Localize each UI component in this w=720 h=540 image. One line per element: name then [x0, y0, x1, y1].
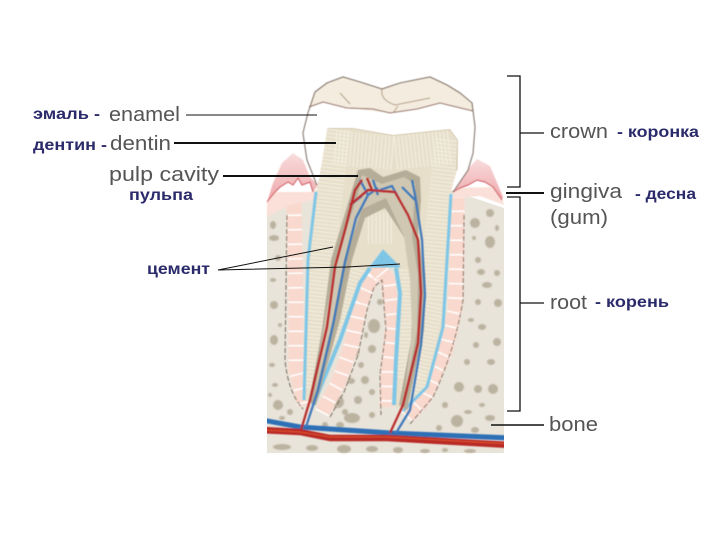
label: enamel: enamel	[109, 104, 180, 126]
tooth anatomy infographic	[33, 75, 700, 454]
periodontal ligament bands	[285, 196, 464, 424]
label: pulp cavity: пульпа	[129, 187, 193, 204]
cementum (blue)	[304, 192, 451, 411]
label: bone	[491, 414, 598, 436]
label: gingiva: - десна	[635, 186, 696, 203]
bracket: crown: - коронка	[617, 124, 699, 141]
label: bone: bone	[549, 414, 598, 436]
blood vessels	[262, 178, 510, 445]
label: dentin: dentin	[110, 133, 171, 155]
enamel crown	[303, 77, 475, 192]
label: pulp cavity	[109, 164, 358, 204]
bracket: crown: crown	[550, 121, 608, 143]
gingiva left	[267, 153, 318, 217]
label: cementum: цемент	[147, 261, 210, 278]
label: gingiva: (gum)	[550, 207, 608, 229]
bone background	[267, 190, 504, 453]
bracket: crown	[507, 76, 699, 187]
bracket: root	[507, 197, 669, 411]
pulp cavity	[309, 168, 425, 410]
label: cementum	[147, 247, 400, 278]
label: gingiva	[506, 181, 696, 229]
bracket: root: - корень	[595, 294, 669, 311]
label: enamel: эмаль -	[33, 106, 100, 123]
bracket: root: root	[550, 292, 587, 314]
label: dentin	[33, 133, 336, 155]
label: pulp cavity: pulp cavity	[109, 164, 219, 186]
label: gingiva: gingiva	[550, 181, 623, 203]
root and dentin	[303, 128, 458, 410]
label: dentin: дентин -	[33, 137, 107, 154]
gingiva right	[452, 159, 504, 205]
label: enamel	[33, 104, 317, 126]
